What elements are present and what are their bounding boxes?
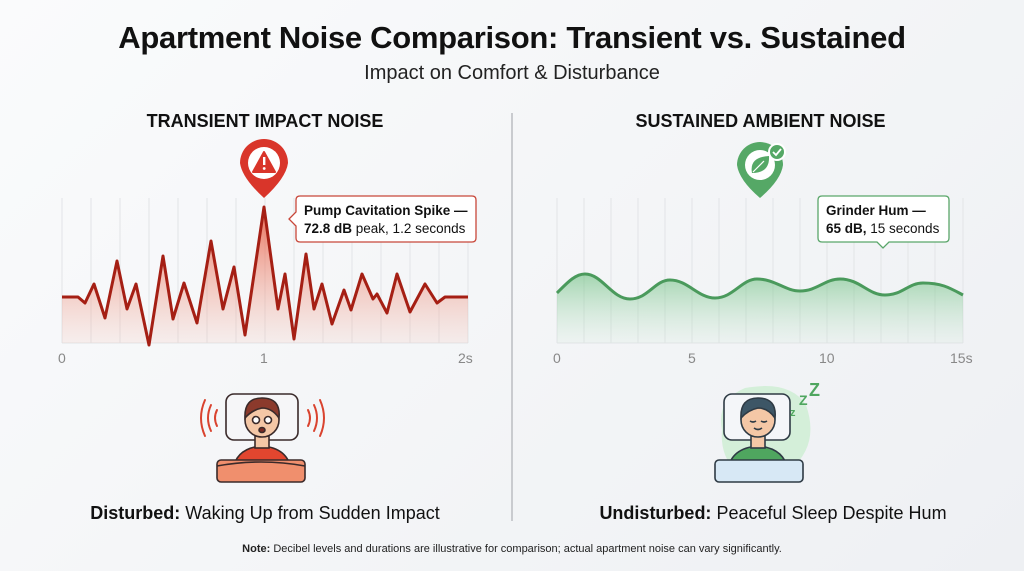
callout: pump spike: Pump Cavitation Spike — (304, 203, 468, 218)
title: Apartment Noise Comparison: Transient vs. Sustained (118, 20, 906, 55)
illustration: peaceful sleeper: z (790, 407, 796, 419)
icon: warning pin (240, 139, 288, 198)
chart: sustained waveform: 10 (819, 350, 835, 366)
illustration: peaceful sleeper: Z (799, 392, 808, 408)
illustration: disturbed sleeper (201, 394, 324, 482)
caption: undisturbed: Undisturbed: Peaceful Sleep Despite Hum (599, 503, 947, 523)
heading: sustained: SUSTAINED AMBIENT NOISE (635, 111, 886, 131)
illustration: peaceful sleeper: Z (809, 380, 820, 400)
callout: pump spike: 72.8 dB peak, 1.2 seconds (304, 221, 466, 236)
heading: transient: TRANSIENT IMPACT NOISE (147, 111, 383, 131)
illustration: peaceful sleeper (715, 380, 820, 482)
chart: sustained waveform (553, 198, 973, 366)
chart: transient waveform: 2s (458, 350, 473, 366)
panel: transient (90, 111, 440, 523)
panel: sustained (599, 111, 947, 523)
footnote: Note: Decibel levels and durations are illustrative for comparison; actual apartment noise can vary significantly. (242, 543, 782, 555)
callout: grinder hum: 65 dB, 15 seconds (826, 221, 940, 236)
chart: sustained waveform: 0 (553, 350, 561, 366)
subtitle: Impact on Comfort & Disturbance (364, 62, 660, 84)
chart: transient waveform (58, 198, 473, 366)
callout: grinder hum (818, 196, 949, 248)
divider (511, 113, 513, 521)
chart: transient waveform: 0 (58, 350, 66, 366)
chart: sustained waveform: 15s (950, 350, 973, 366)
callout: pump spike (289, 196, 476, 242)
caption: disturbed: Disturbed: Waking Up from Sudden Impact (90, 503, 440, 523)
icon: leaf pin (737, 142, 785, 198)
callout: grinder hum: Grinder Hum — (826, 203, 926, 218)
chart: transient waveform: 1 (260, 350, 268, 366)
chart: sustained waveform: 5 (688, 350, 696, 366)
